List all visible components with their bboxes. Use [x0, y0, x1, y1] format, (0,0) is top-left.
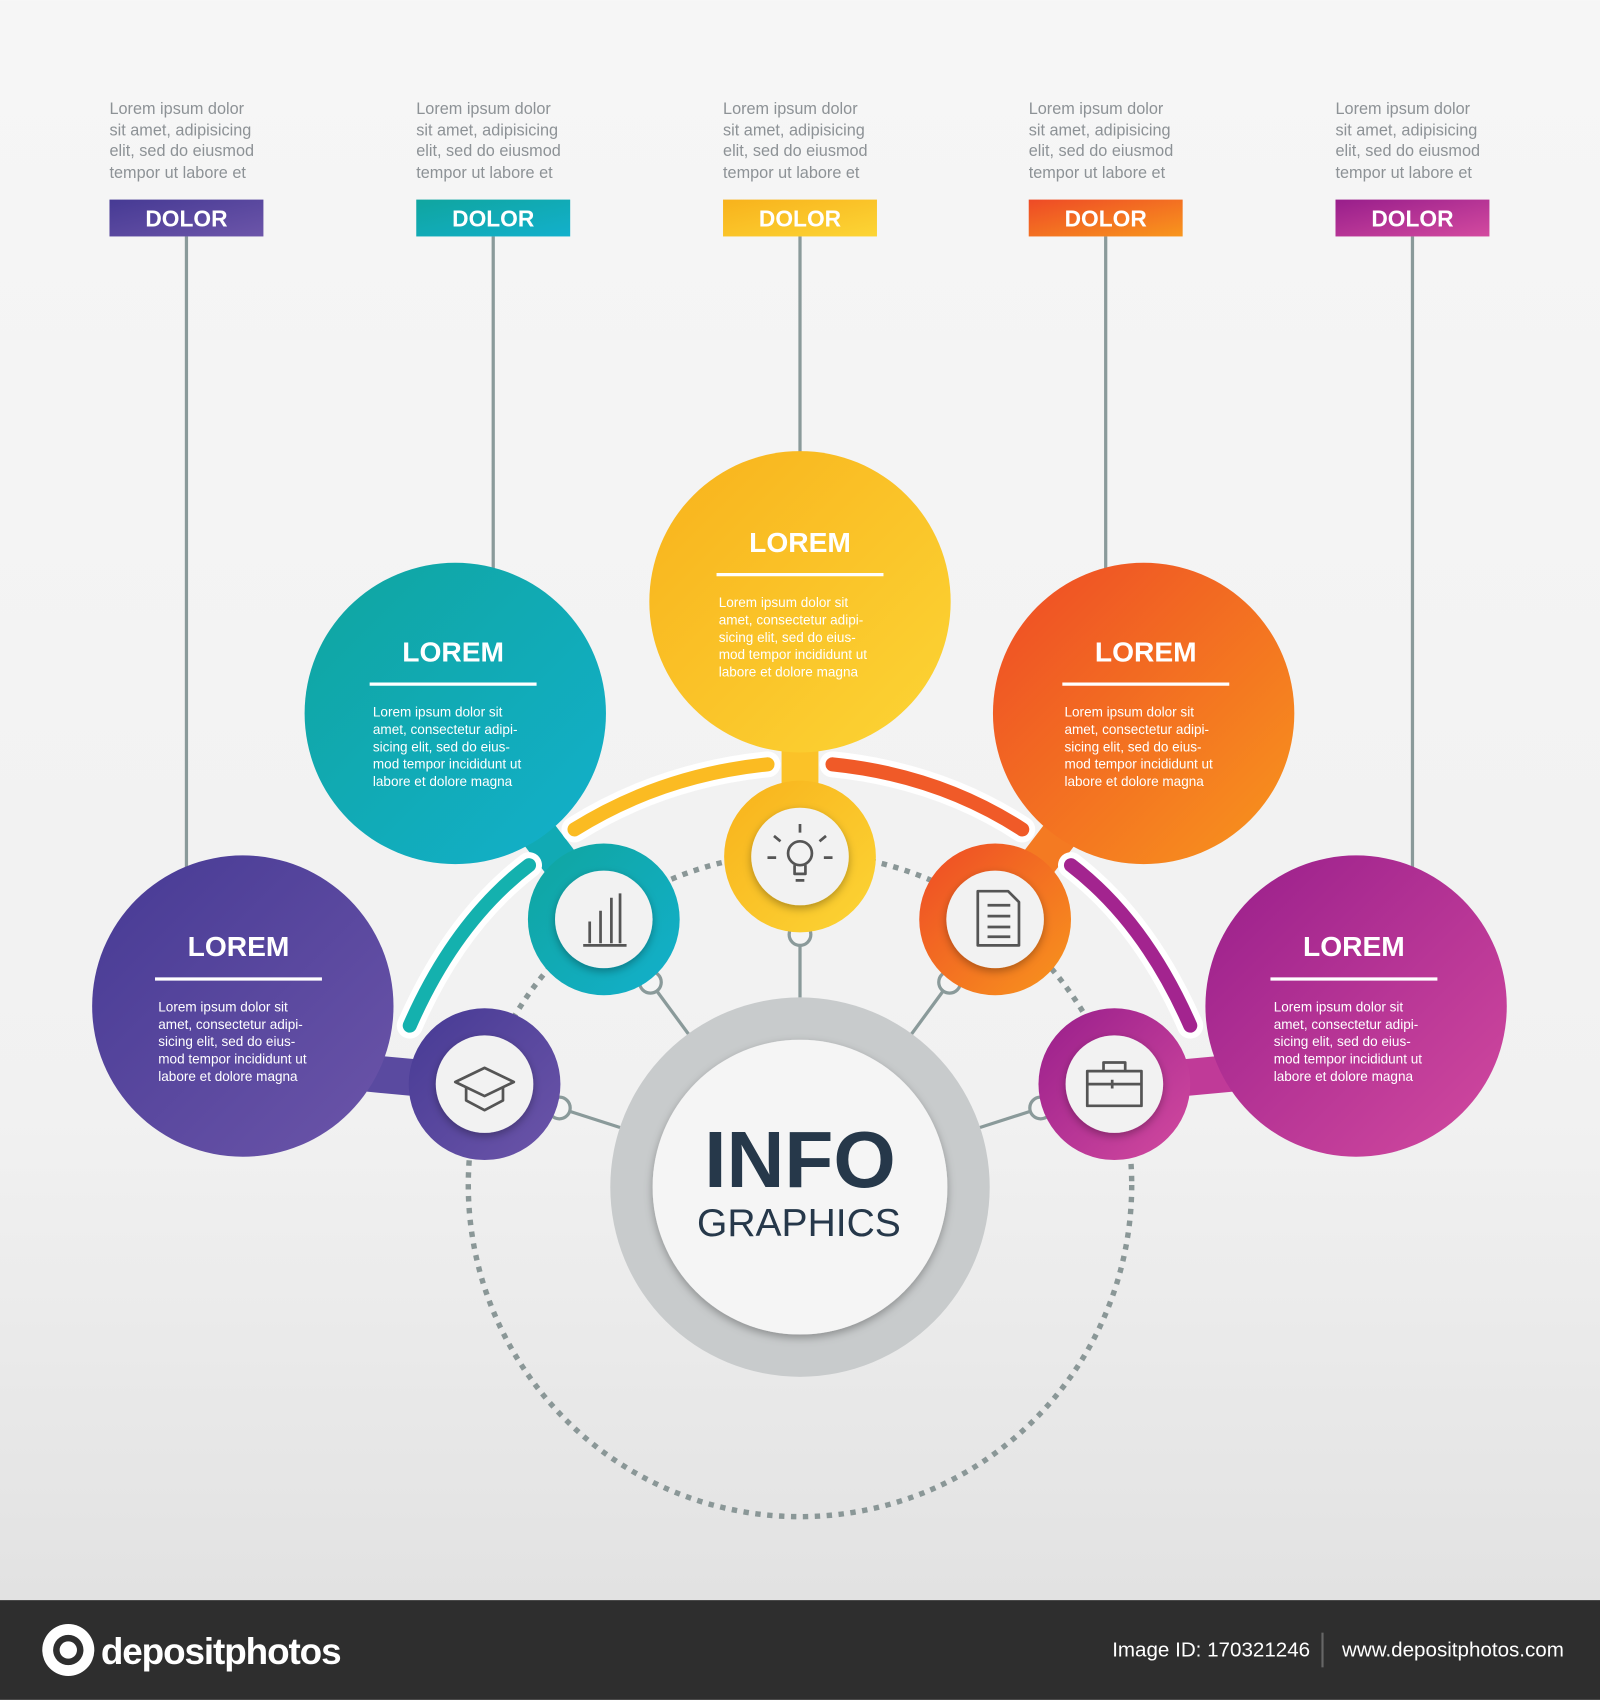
icon: briefcase	[1087, 1062, 1141, 1106]
top text blocks: elit, sed do eiusmod	[109, 142, 254, 160]
DOLOR tags: DOLOR	[1371, 206, 1454, 232]
bubble texts: Lorem ipsum dolor sit	[158, 1000, 288, 1015]
icon discs	[436, 808, 1163, 1133]
bubble texts: sicing elit, sed do eius-	[719, 630, 856, 645]
footer: depositphotos	[101, 1631, 341, 1672]
bubble texts: sicing elit, sed do eius-	[373, 739, 510, 754]
top text blocks: elit, sed do eiusmod	[416, 142, 561, 160]
top text blocks: Lorem ipsum dolor	[1336, 100, 1471, 118]
top text blocks: sit amet, adipisicing	[1336, 122, 1477, 140]
bubble texts: mod tempor incididunt ut	[1274, 1052, 1422, 1067]
dotted orbit	[468, 853, 1132, 1517]
bubble texts: Lorem ipsum dolor sit	[1064, 705, 1194, 720]
icon: graduation cap	[455, 1068, 514, 1110]
bubble texts: LOREM	[1095, 635, 1197, 667]
bubble texts: sicing elit, sed do eius-	[158, 1034, 295, 1049]
bubble texts: amet, consectetur adipi-	[158, 1017, 303, 1032]
bubble texts: LOREM	[1303, 930, 1405, 962]
bubble: purple	[92, 855, 560, 1160]
bubble: teal	[305, 563, 680, 995]
icons	[455, 824, 1141, 1110]
top text blocks: Lorem ipsum dolor	[723, 100, 858, 118]
bubble texts: labore et dolore magna	[1064, 774, 1204, 789]
top text blocks: Lorem ipsum dolor	[1029, 100, 1164, 118]
top text blocks: tempor ut labore et	[1029, 164, 1166, 182]
center hub	[610, 997, 990, 1377]
top text blocks: elit, sed do eiusmod	[1336, 142, 1480, 160]
arcs	[410, 764, 1190, 1026]
connectors from center to icons	[549, 924, 1051, 1128]
bubble texts: amet, consectetur adipi-	[719, 613, 863, 628]
top text blocks: tempor ut labore et	[416, 164, 553, 182]
top text blocks: Lorem ipsum dolor	[416, 100, 551, 118]
top text blocks: sit amet, adipisicing	[1029, 122, 1171, 140]
icon: light bulb	[767, 824, 833, 880]
bubble: magenta	[1038, 855, 1507, 1160]
icon: document	[978, 891, 1019, 945]
DOLOR tags: DOLOR	[1065, 206, 1147, 232]
bubble texts: labore et dolore magna	[719, 665, 858, 680]
top text blocks: tempor ut labore et	[723, 164, 860, 182]
footer: www.depositphotos.com	[1341, 1639, 1564, 1662]
top text blocks: tempor ut labore et	[1336, 164, 1472, 182]
bubble texts: LOREM	[749, 526, 851, 558]
bubble texts: labore et dolore magna	[1274, 1069, 1414, 1084]
top text blocks: tempor ut labore et	[109, 164, 246, 182]
footer	[0, 1600, 1600, 1700]
top text blocks: sit amet, adipisicing	[723, 122, 865, 140]
bubble texts: mod tempor incididunt ut	[719, 647, 867, 662]
DOLOR tags: DOLOR	[145, 206, 228, 232]
bubble texts: amet, consectetur adipi-	[1064, 722, 1209, 737]
icon: bar chart	[583, 893, 627, 945]
center hub: INFO	[704, 1114, 896, 1204]
bubble texts: LOREM	[402, 635, 504, 667]
bubble texts: amet, consectetur adipi-	[1274, 1017, 1418, 1032]
bubble texts: mod tempor incididunt ut	[158, 1052, 307, 1067]
center hub: GRAPHICS	[697, 1202, 901, 1245]
DOLOR tags: DOLOR	[759, 206, 841, 232]
bubble texts: Lorem ipsum dolor sit	[373, 705, 503, 720]
bubble texts: mod tempor incididunt ut	[1064, 757, 1213, 772]
bubble texts	[155, 526, 1437, 1084]
bubble texts: sicing elit, sed do eius-	[1064, 739, 1202, 754]
bubble texts: mod tempor incididunt ut	[373, 757, 521, 772]
DOLOR tags	[109, 200, 1489, 236]
top text blocks: Lorem ipsum dolor	[109, 100, 245, 118]
vertical leader lines	[186, 236, 1412, 867]
top text blocks	[109, 100, 1480, 182]
bubble texts: sicing elit, sed do eius-	[1274, 1034, 1411, 1049]
bubble texts: LOREM	[188, 930, 289, 962]
top text blocks: elit, sed do eiusmod	[1029, 142, 1173, 160]
bubble texts: Lorem ipsum dolor sit	[719, 595, 848, 610]
bubble texts: amet, consectetur adipi-	[373, 722, 517, 737]
footer: Image ID: 170321246	[1112, 1639, 1310, 1662]
bubble texts: Lorem ipsum dolor sit	[1274, 1000, 1403, 1015]
DOLOR tags: DOLOR	[452, 206, 534, 232]
bubble texts: labore et dolore magna	[158, 1069, 298, 1084]
top text blocks: sit amet, adipisicing	[416, 122, 558, 140]
top text blocks: sit amet, adipisicing	[109, 122, 251, 140]
top text blocks: elit, sed do eiusmod	[723, 142, 868, 160]
bubble: yellow	[649, 451, 951, 932]
bubble: orange	[919, 563, 1294, 995]
bubble texts: labore et dolore magna	[373, 774, 513, 789]
